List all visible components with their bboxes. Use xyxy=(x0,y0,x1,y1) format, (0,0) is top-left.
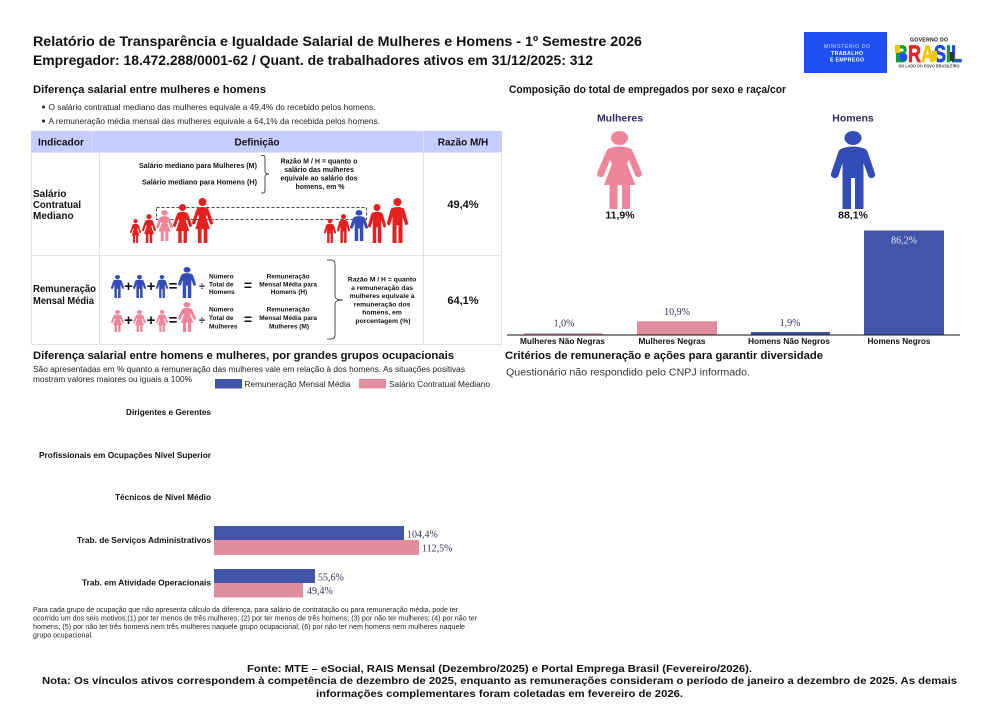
logo: Ministério do Trabalho e Emprego xyxy=(804,32,887,73)
heading: composição: Composição do total de empregados por sexo e raça/cor xyxy=(509,84,787,96)
row: Salário Contratual Mediano: salário das mulheres xyxy=(284,167,354,174)
pictogram: Mulheres: 11,9% xyxy=(605,210,635,222)
icon equation: men: + xyxy=(124,278,133,295)
brace xyxy=(327,260,343,339)
bar chart: grupos ocupacionais: Trab. de Serviços Administrativos xyxy=(77,536,211,545)
chart description xyxy=(33,365,465,384)
logo: Ministério do Trabalho e Emprego: MINISTÉRIO DO xyxy=(824,43,870,50)
bar chart: composição por sexo e raça/cor: 86,2% xyxy=(891,236,917,246)
table: indicadores xyxy=(31,131,502,344)
icon equation: men xyxy=(111,267,319,298)
bar chart: grupos ocupacionais: Dirigentes e Gerentes xyxy=(126,408,211,417)
row: Remuneração Mensal Média: mulheres equivale à xyxy=(350,293,415,300)
bar chart: composição por sexo e raça/cor: 10,9% xyxy=(664,307,690,318)
icon: women group xyxy=(130,198,213,243)
icon equation: men: + xyxy=(147,278,156,295)
bar chart: grupos ocupacionais: 104,4% xyxy=(407,530,438,540)
row: Remuneração Mensal Média: porcentagem (%) xyxy=(355,318,411,325)
bar chart: composição por sexo e raça/cor xyxy=(507,230,960,346)
legend xyxy=(215,379,490,389)
icon: men group xyxy=(324,198,408,243)
row: Salário Contratual Mediano: Salário xyxy=(33,189,66,200)
icon equation: men: Homens xyxy=(209,289,235,296)
bar chart: composição por sexo e raça/cor: Mulheres Negras xyxy=(638,337,706,346)
bar chart: grupos ocupacionais: 112,5% xyxy=(422,544,452,554)
row: Remuneração Mensal Média: Mensal Média xyxy=(33,296,94,307)
title: Empregador: 18.472.288/0001-62 / Quant. de trabalhadores ativos em 31/12/2025: 312 xyxy=(33,53,593,69)
bar chart: grupos ocupacionais: Técnicos de Nível Médio xyxy=(115,493,211,502)
table header: Razão M/H xyxy=(438,138,488,148)
row: Salário Contratual Mediano: 49,4% xyxy=(447,199,479,211)
heading: critérios: Critérios de remuneração e ações para garantir diversidade xyxy=(505,350,823,362)
footnote: homens; (5) por não ter três homens nem três mulheres naquele grupo ocupacional; (6) por não ter nem homens nem mulheres naquele xyxy=(33,624,465,631)
chart description: São apresentadas em % quanto a remuneração das mulheres vale em relação à dos homens. As situações positivas xyxy=(33,365,465,374)
icon equation: men: = xyxy=(169,278,178,295)
row: Salário Contratual Mediano xyxy=(33,156,479,243)
chart description: mostram valores maiores ou iguais a 100% xyxy=(33,375,192,384)
row: Salário Contratual Mediano: Razão M / H = quanto o xyxy=(281,158,357,166)
logo: Governo do Brasil: GOVERNO DO xyxy=(910,38,948,44)
table header xyxy=(31,131,502,152)
heading: diferença salarial: Diferença salarial entre mulheres e homens xyxy=(33,84,266,96)
icon equation: women: = xyxy=(244,311,252,327)
icon equation: men: Mensal Média para xyxy=(259,282,317,288)
pictogram: Mulheres xyxy=(597,112,643,222)
logo: Governo do Brasil: DO LADO DO POVO BRASILEIRO xyxy=(898,64,960,68)
row: Salário Contratual Mediano: Contratual xyxy=(33,200,81,211)
footnote: ocorrido um dos seis motivos:(1) por ter menos de três mulheres; (2) por ter menos de três homens; (3) por não ter mulheres; (4) por não ter xyxy=(33,616,478,622)
pictogram: Mulheres: Mulheres xyxy=(597,112,643,124)
bar chart: composição por sexo e raça/cor: 1,9% xyxy=(780,318,800,329)
logo: Governo do Brasil: BRASIL xyxy=(895,41,962,68)
footer note: Fonte: MTE – eSocial, RAIS Mensal (Dezembro/2025) e Portal Emprega Brasil (Fevereiro/2026). xyxy=(247,663,752,675)
legend: Salário Contratual Mediano xyxy=(389,380,490,389)
row: Salário Contratual Mediano: Salário mediano para Mulheres (M) xyxy=(139,163,257,170)
icon equation: women: Mulheres xyxy=(209,324,238,330)
bar chart: composição por sexo e raça/cor: Homens Não Negros xyxy=(748,337,830,346)
bar chart: grupos ocupacionais: 55,6% xyxy=(318,572,344,584)
icon equation: women: Remuneração xyxy=(267,306,310,314)
row: Remuneração Mensal Média: a remuneração das xyxy=(351,285,413,292)
icon equation: men: Homens (H) xyxy=(271,289,307,296)
pictogram: Homens: Homens xyxy=(832,112,874,124)
footnote xyxy=(33,607,478,640)
bar chart: grupos ocupacionais: Trab. em Atividade Operacionais xyxy=(82,578,211,588)
pictogram: Homens: 88,1% xyxy=(838,210,869,222)
icon equation: women: + xyxy=(124,312,133,329)
legend: Remuneração Mensal Média xyxy=(244,380,351,389)
row: Salário Contratual Mediano: equivale ao salário dos xyxy=(281,176,358,182)
footnote: Para cada grupo de ocupação que não apresenta cálculo da diferença, para salário de contratação ou para remuneração média, pode ter xyxy=(33,607,459,614)
brace xyxy=(261,156,269,193)
icon equation: women: + xyxy=(147,312,156,329)
bullet list: A remuneração média mensal das mulheres equivale a 64,1% da recebida pelos homens. xyxy=(48,117,380,126)
title xyxy=(33,34,642,69)
heading: diferença por grupos ocupacionais: Diferença salarial entre homens e mulheres, por grandes grupos ocupacionais xyxy=(33,350,454,362)
footer note: informações complementares foram coletadas em fevereiro de 2026. xyxy=(316,688,683,700)
icon equation: women: = xyxy=(169,312,178,329)
icon equation: men: ÷ xyxy=(199,281,205,293)
icon equation: women xyxy=(111,302,319,332)
footnote: grupo ocupacional. xyxy=(33,632,93,640)
icon equation: women: Número xyxy=(209,306,234,314)
bar chart: grupos ocupacionais: 49,4% xyxy=(307,586,333,597)
row: Salário Contratual Mediano: homens, em % xyxy=(295,184,345,191)
row: Remuneração Mensal Média xyxy=(33,260,479,339)
row: Remuneração Mensal Média: homens, em xyxy=(362,310,402,316)
row: Salário Contratual Mediano: Mediano xyxy=(33,211,74,222)
icon equation: women: Total de xyxy=(209,315,234,322)
icon equation: men: Remuneração xyxy=(267,274,310,280)
logo: Ministério do Trabalho e Emprego: TRABALHO xyxy=(831,51,863,57)
bar chart: composição por sexo e raça/cor: Mulheres Não Negras xyxy=(520,337,605,346)
row: Remuneração Mensal Média: 64,1% xyxy=(447,295,479,307)
row: Remuneração Mensal Média: Razão M / H = quanto xyxy=(348,276,416,284)
text: questionário: Questionário não respondido pelo CNPJ informado. xyxy=(506,368,750,378)
icon equation: men: Total de xyxy=(209,282,234,288)
bar chart: grupos ocupacionais xyxy=(39,408,452,598)
icon equation: women: Mensal Média para xyxy=(259,315,317,322)
title: Relatório de Transparência e Igualdade Salarial de Mulheres e Homens - 1º Semestre 2026 xyxy=(33,34,642,50)
bar chart: composição por sexo e raça/cor: Homens Negros xyxy=(868,337,931,346)
bar chart: composição por sexo e raça/cor: 1,0% xyxy=(554,318,574,330)
dashed comparison box xyxy=(156,208,366,220)
bullet list: O salário contratual mediano das mulheres equivale a 49,4% do recebido pelos homens. xyxy=(48,103,375,112)
table header: Definição xyxy=(234,138,280,148)
icon equation: women: ÷ xyxy=(199,315,205,327)
bar chart: grupos ocupacionais: Profissionais em Ocupações Nível Superior xyxy=(39,451,212,460)
row: Remuneração Mensal Média: Remuneração xyxy=(33,284,96,295)
row: Salário Contratual Mediano: Salário mediano para Homens (H) xyxy=(142,180,257,186)
row: Remuneração Mensal Média: remuneração dos xyxy=(354,302,411,308)
table header: Indicador xyxy=(38,138,84,148)
pictogram: Homens xyxy=(831,112,875,222)
icon equation: men: = xyxy=(244,277,252,293)
bullet list xyxy=(42,103,380,126)
icon equation: men: Número xyxy=(209,274,234,280)
footer note xyxy=(42,663,957,700)
logo: Ministério do Trabalho e Emprego: E EMPREGO xyxy=(830,58,864,64)
icon equation: women: Mulheres (M) xyxy=(269,324,309,330)
footer note: Nota: Os vínculos ativos correspondem à competência de dezembro de 2025, enquanto as remunerações consideram o período de janeiro a dezembro de 2025. As demais xyxy=(42,675,957,687)
